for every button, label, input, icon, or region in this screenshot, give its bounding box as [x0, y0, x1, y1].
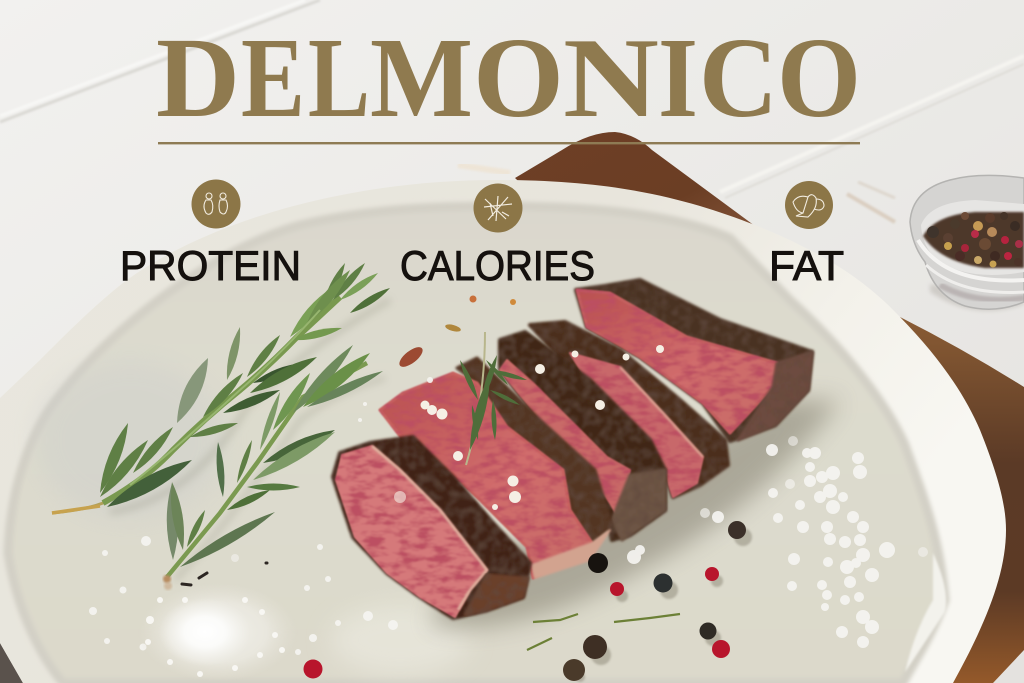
glass bowl with peppercorns — [910, 175, 1024, 311]
label: fat: FAT — [769, 242, 844, 289]
steak slices — [333, 280, 840, 628]
title: D — [156, 14, 240, 141]
title: I — [658, 14, 698, 141]
rosemary sprig: upper — [52, 261, 392, 513]
spice flakes — [396, 296, 680, 650]
salt pile — [138, 582, 298, 682]
rosemary sprig on steak — [458, 332, 528, 465]
label: calories: CALORIES — [400, 242, 595, 289]
title: E — [241, 14, 305, 141]
title: C — [699, 14, 778, 141]
title divider — [158, 142, 860, 144]
slice 5 (back) — [576, 280, 812, 441]
title: N — [563, 14, 659, 141]
icon: fat — [785, 181, 833, 229]
slice 3 — [500, 332, 665, 540]
white plate — [0, 180, 1006, 683]
peppercorns — [304, 521, 752, 682]
fat crumbs on steak — [394, 345, 664, 510]
title: O — [473, 14, 564, 141]
title: L — [308, 14, 370, 141]
label: protein: PROTEIN — [120, 242, 301, 289]
dark grains — [182, 563, 267, 585]
title: M — [370, 14, 473, 141]
icon: protein — [192, 180, 240, 228]
coarse salt crystals — [89, 377, 928, 655]
slice 4 — [530, 322, 728, 497]
slice 2 — [380, 358, 612, 578]
icon: calories — [474, 184, 522, 232]
title: O — [777, 14, 861, 141]
rosemary sprig: lower — [163, 342, 385, 583]
slice 1 (front) — [333, 437, 530, 618]
